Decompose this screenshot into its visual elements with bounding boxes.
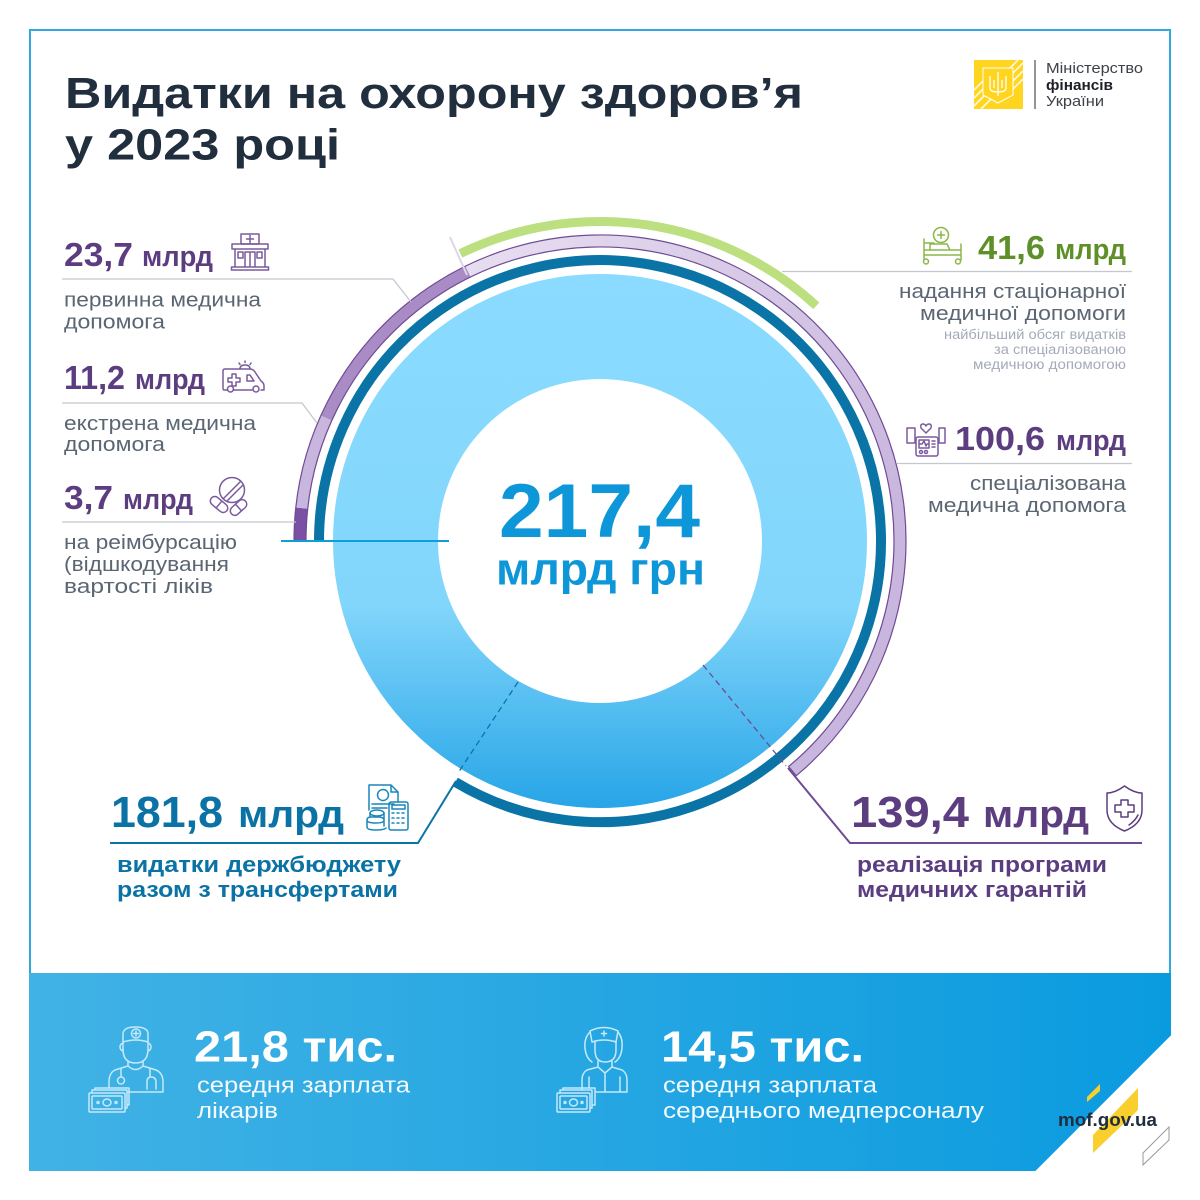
stat: nurses salary	[557, 1022, 984, 1123]
description: середня зарплата	[197, 1072, 411, 1098]
purple arc: 139,4	[294, 235, 906, 776]
value: 21,8 тис.	[194, 1022, 397, 1072]
callout: state budget	[110, 781, 456, 902]
value: 181,8	[111, 788, 223, 837]
icon: pills	[208, 478, 249, 517]
description: надання стаціонарної	[899, 280, 1126, 303]
title: у 2023 році	[65, 120, 340, 170]
item: primary care	[62, 234, 411, 334]
donut chart	[281, 221, 906, 822]
value	[955, 420, 1126, 457]
value: млрд	[1056, 425, 1126, 457]
description: медична допомога	[928, 494, 1127, 517]
value: млрд	[135, 364, 205, 396]
description	[899, 280, 1126, 325]
centre total: 217,4	[499, 469, 700, 554]
description: первинна медична	[64, 288, 262, 312]
description: медичних гарантій	[857, 877, 1087, 902]
value: млрд	[142, 241, 213, 273]
stat: doctors salary	[89, 1022, 411, 1123]
value: 23,7	[64, 236, 133, 273]
value	[64, 479, 193, 516]
logo: Ministry of Finance	[974, 60, 1143, 110]
dashed leader: 139,4	[703, 665, 786, 766]
description: середня зарплата	[663, 1072, 878, 1098]
description	[197, 1072, 411, 1123]
description	[64, 412, 257, 456]
ministry name: Міністерство	[1046, 60, 1143, 77]
dashed leader: 181,8	[458, 682, 518, 773]
value	[111, 788, 344, 837]
description: допомога	[64, 433, 166, 456]
callout: medical guarantees	[788, 768, 1142, 902]
description: на реімбурсацію	[64, 531, 237, 554]
icon: budget calculator	[367, 785, 408, 830]
value	[64, 236, 213, 273]
icon: doctor with money	[89, 1027, 163, 1112]
description: спеціалізована	[970, 472, 1127, 495]
value	[978, 229, 1126, 266]
description	[64, 531, 237, 598]
ministry name: України	[1046, 93, 1104, 110]
main ring	[386, 326, 814, 756]
description: лікарів	[197, 1098, 278, 1123]
item: specialized care	[897, 420, 1132, 517]
value: млрд	[123, 484, 193, 516]
note: за спеціалізованою	[994, 342, 1126, 357]
icon: hospital	[232, 234, 268, 270]
title: Видатки на охорону здоров’я	[65, 69, 803, 118]
stripes	[1087, 1084, 1169, 1165]
value	[851, 788, 1089, 837]
title	[65, 69, 803, 170]
description	[64, 288, 262, 334]
value: 41,6	[978, 229, 1045, 266]
value: млрд	[238, 794, 344, 836]
icon: yellow emblem	[974, 60, 1023, 109]
value: 139,4	[851, 788, 970, 837]
icon: medical monitor	[907, 424, 945, 456]
description	[857, 852, 1107, 902]
description: допомога	[64, 310, 166, 334]
item: inpatient care	[782, 228, 1132, 372]
note	[944, 327, 1126, 372]
value: 100,6	[955, 420, 1045, 457]
description: медичної допомоги	[920, 302, 1126, 325]
website mark	[1058, 1084, 1169, 1165]
value: 14,5 тис.	[661, 1022, 864, 1072]
description: екстрена медична	[64, 412, 257, 435]
value: млрд	[983, 794, 1089, 836]
value: 3,7	[64, 479, 113, 516]
description	[117, 852, 402, 902]
description: вартості ліків	[64, 575, 213, 598]
ministry name: фінансів	[1046, 77, 1113, 94]
centre total: млрд грн	[496, 544, 705, 594]
description	[663, 1072, 984, 1123]
green arc: 41,6	[460, 221, 816, 306]
icon: nurse with money	[557, 1028, 627, 1112]
value: 11,2	[64, 359, 125, 396]
website url: mof.gov.ua	[1058, 1109, 1158, 1130]
icon: hospital bed	[924, 228, 961, 264]
description	[928, 472, 1127, 517]
description: видатки держбюджету	[117, 852, 402, 877]
item: emergency care	[62, 359, 317, 456]
icon: shield	[1107, 786, 1142, 831]
centre total	[496, 469, 705, 594]
bottom band	[29, 973, 1171, 1171]
item: reimbursement	[62, 478, 296, 598]
description: (відшкодування	[64, 553, 229, 576]
description: середнього медперсоналу	[663, 1098, 984, 1123]
icon: ambulance	[223, 361, 264, 392]
value: млрд	[1055, 234, 1126, 266]
dark blue arc: 181,8	[319, 260, 881, 822]
ministry name	[1046, 60, 1143, 110]
note: найбільший обсяг видатків	[944, 327, 1126, 342]
value	[64, 359, 205, 396]
description: разом з трансфертами	[117, 877, 398, 902]
description: реалізація програми	[857, 852, 1107, 877]
note: медичною допомогою	[973, 357, 1126, 372]
